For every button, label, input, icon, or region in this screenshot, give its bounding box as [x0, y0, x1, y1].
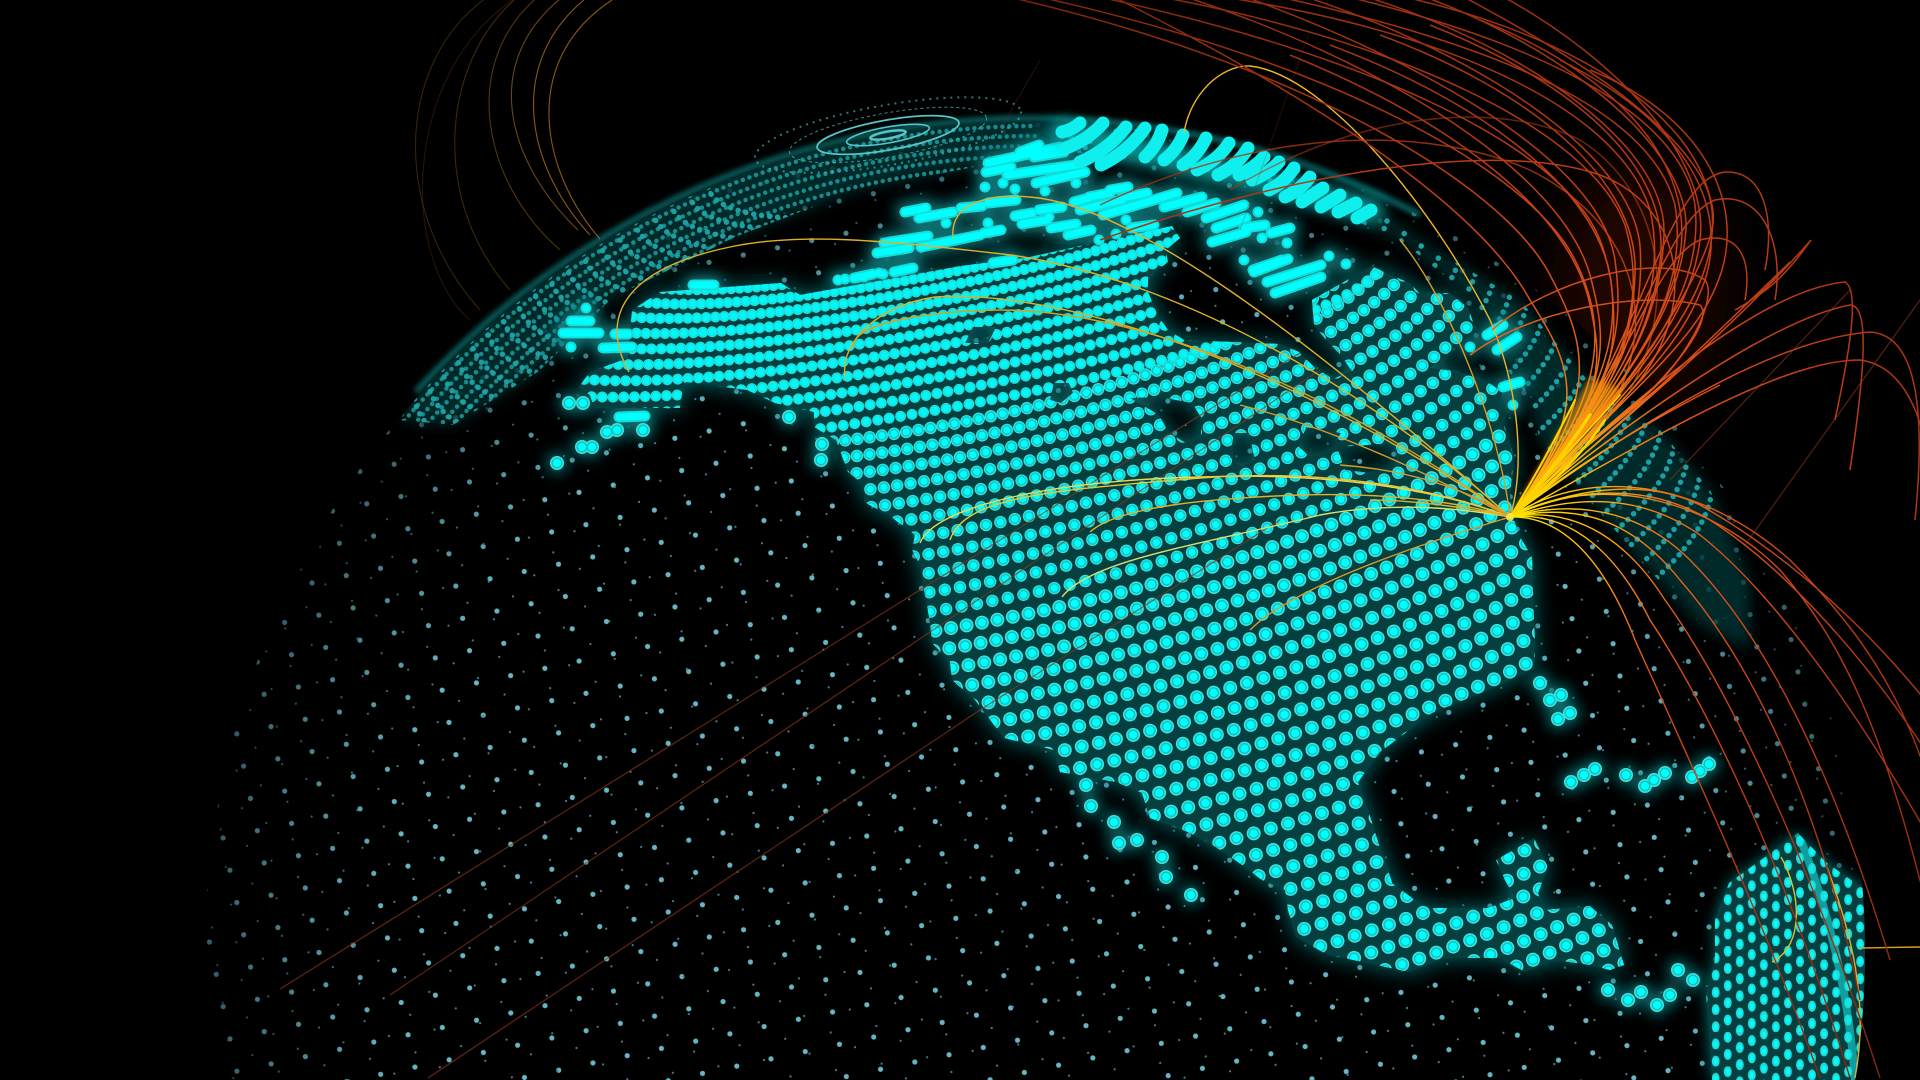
far-side dim continents [400, 122, 1756, 650]
globe rim glow [416, 119, 1420, 392]
fan of orange arcs rising from the hub and curving over the globe [1000, 0, 1920, 520]
red haze behind fan [1560, 165, 1720, 405]
north america dot rows [581, 226, 1624, 971]
land glow [557, 145, 1709, 1005]
globe body [205, 122, 1865, 1080]
hub: bright yellow core of the fan [1506, 378, 1625, 521]
north pole concentric rings [750, 82, 1026, 188]
islands: baja, florida, caribbean, central america, aleutians [557, 403, 1709, 1005]
greenland rim stripes [1062, 123, 1371, 218]
ocean dot field [205, 122, 1865, 1080]
gold arcs across the continent [617, 66, 1920, 1078]
south america [1706, 833, 1870, 1080]
land base [578, 226, 1624, 972]
lower-right arcs leaving the hub [1510, 487, 1920, 1078]
arctic islands and coastal bars [563, 145, 1520, 417]
arcs behind globe: upper-left faint gold curves [416, 0, 612, 320]
